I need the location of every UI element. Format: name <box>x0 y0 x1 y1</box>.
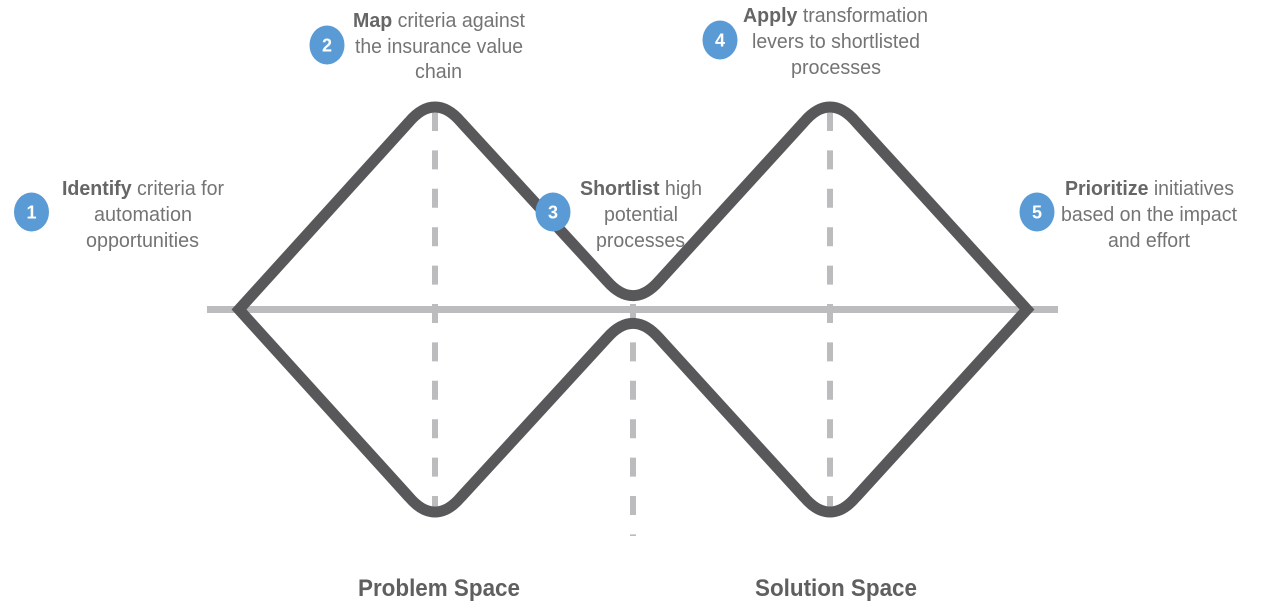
step 4: processes <box>791 57 881 79</box>
step 2: Map criteria against <box>353 10 525 32</box>
step 3: processes <box>596 230 685 252</box>
step 1: opportunities <box>86 230 199 252</box>
step 3: 3 <box>548 202 558 222</box>
heading: solution space: Solution Space <box>755 575 917 602</box>
step 1: automation <box>94 204 192 226</box>
step 5: and effort <box>1108 230 1190 252</box>
step 5 <box>1020 178 1237 252</box>
horizontal axis <box>207 306 1058 313</box>
step 3 <box>536 178 702 252</box>
step 1 <box>14 178 224 252</box>
step 2: the insurance value <box>355 36 523 58</box>
step 3: Shortlist high <box>580 178 702 200</box>
dashed vertical guides <box>435 112 830 536</box>
step 4: levers to shortlisted <box>752 31 920 53</box>
step 2: chain <box>415 61 462 83</box>
step 4: 4 <box>715 30 725 50</box>
step 5: 5 <box>1032 202 1042 222</box>
step 2 <box>310 10 525 83</box>
step 3: potential <box>604 204 678 226</box>
double diamond outline <box>239 107 1027 512</box>
heading: problem space: Problem Space <box>358 575 520 602</box>
step 2: 2 <box>322 36 332 56</box>
step 4 <box>702 5 928 79</box>
step 5: based on the impact <box>1061 204 1237 226</box>
step 5: Prioritize initiatives <box>1065 178 1234 200</box>
step 1: Identify criteria for <box>62 178 224 200</box>
step 1: 1 <box>26 202 37 222</box>
step 4: Apply transformation <box>743 5 928 27</box>
